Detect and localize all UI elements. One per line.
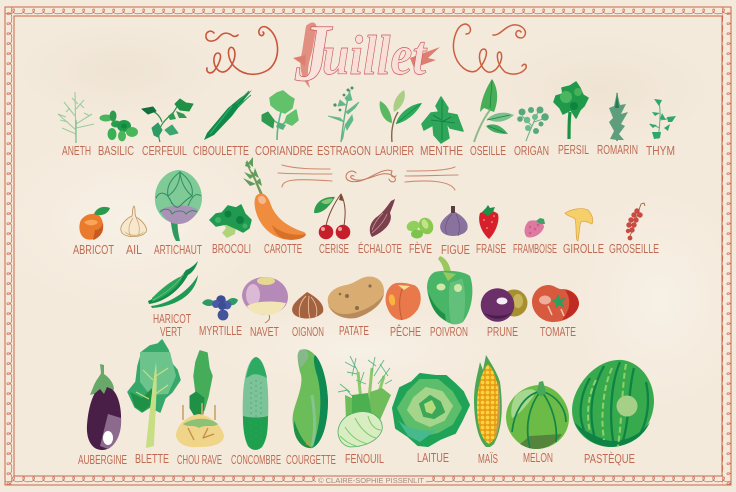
icon: coriandre: [262, 91, 298, 140]
labels: row 2: FRAISE: [476, 241, 506, 256]
labels: row 4: LAITUE: [417, 450, 449, 465]
title: J: [294, 7, 334, 98]
icon: ciboulette: [204, 90, 252, 140]
icon: persil: [554, 82, 588, 139]
labels: row 4: FENOUIL: [345, 451, 384, 466]
copyright credit: © CLAIRE-SOPHIE PISSENLIT: [318, 477, 425, 485]
title: [293, 7, 440, 98]
icon: ail: [121, 206, 146, 237]
icon: fraise: [479, 205, 498, 239]
labels: herbs: PERSIL: [558, 142, 589, 157]
labels: row 2: ARTICHAUT: [154, 242, 202, 257]
labels: row 2: FRAMBOISE: [513, 241, 557, 256]
icon: framboise: [525, 218, 545, 237]
labels: row 2: GROSEILLE: [609, 241, 659, 256]
labels: herbs: THYM: [646, 143, 675, 158]
labels: herbs: MENTHE: [420, 143, 463, 158]
labels: row 2: GIROLLE: [563, 241, 604, 256]
icon: artichaut: [155, 170, 202, 241]
right flourish: [454, 24, 526, 74]
icon: maïs: [474, 355, 502, 447]
labels: herbs: ANETH: [62, 143, 91, 158]
labels: row 2: ÉCHALOTE: [358, 241, 402, 256]
labels: herbs: LAURIER: [375, 143, 414, 158]
title: uillet: [322, 25, 427, 87]
labels: row 2: CERISE: [319, 241, 349, 256]
icon: navet: [242, 277, 288, 323]
title ribbon accents: [293, 23, 440, 88]
icon: concombre: [243, 357, 268, 450]
icon: blette: [128, 340, 180, 448]
labels: herbs: ESTRAGON: [317, 143, 371, 158]
labels: row 4: [78, 450, 635, 467]
icon: carotte: [243, 157, 306, 240]
icon: brocoli: [210, 205, 251, 238]
icon: échalote: [370, 199, 395, 237]
labels: row 3: POIVRON: [430, 324, 468, 339]
labels: row 4: PASTÈQUE: [584, 451, 635, 466]
left flourish: [206, 27, 278, 74]
icon: cerfeuil: [142, 99, 193, 142]
icon: tomate: [532, 285, 579, 322]
labels: row 2: [73, 241, 659, 257]
labels: herbs: ORIGAN: [514, 143, 549, 158]
row 4: large vegetables: [78, 340, 654, 467]
icon: abricot: [79, 207, 110, 240]
icon: cerise: [314, 193, 350, 239]
labels: row 3: PRUNE: [487, 324, 518, 339]
labels: row 3: TOMATE: [540, 324, 576, 339]
icon: pastèque: [572, 360, 654, 447]
icon: courgette: [293, 349, 328, 448]
icon: melon: [506, 381, 569, 449]
icon: laitue: [393, 374, 469, 446]
labels: herbs: ROMARIN: [597, 142, 638, 157]
icon: patate: [328, 276, 384, 318]
icon: fenouil: [338, 356, 392, 447]
icon: chou rave: [176, 351, 224, 447]
icon: figue: [440, 206, 468, 236]
labels: row 4: CHOU RAVE: [177, 452, 222, 467]
icon: oignon: [292, 292, 323, 319]
labels: row 4: COURGETTE: [286, 452, 336, 467]
icon: estragon: [328, 86, 359, 142]
labels: row 4: BLETTE: [135, 451, 169, 466]
icon: aneth: [58, 92, 94, 143]
icon: romarin: [609, 92, 628, 141]
icon: laurier: [380, 90, 422, 142]
labels: row 4: MAÏS: [478, 451, 498, 466]
labels: herbs: BASILIC: [98, 143, 134, 158]
labels: herbs: CORIANDRE: [255, 143, 313, 158]
labels: row 3: NAVET: [250, 324, 279, 339]
labels: herbs: [62, 142, 675, 158]
icon: haricot vert: [148, 261, 198, 308]
labels: row 3: OIGNON: [292, 324, 324, 339]
fennel fronds: [338, 356, 392, 396]
labels: row 3: VERT: [160, 324, 182, 339]
icon: aubergine: [87, 364, 121, 450]
icon: pêche: [386, 283, 421, 320]
labels: row 2: CAROTTE: [264, 241, 302, 256]
row 3: vegetables and fruits: [148, 256, 579, 339]
labels: herbs: OSEILLE: [470, 143, 506, 158]
labels: row 2: FÈVE: [409, 241, 432, 256]
icon: origan: [517, 106, 549, 141]
labels: row 3: MYRTILLE: [199, 323, 242, 338]
icon: myrtille: [202, 295, 238, 320]
labels: row 2: FIGUE: [441, 242, 470, 257]
icon: thym: [649, 99, 676, 139]
labels: row 2: ABRICOT: [73, 242, 114, 257]
icon: oseille: [474, 79, 514, 142]
labels: row 3: HARICOT: [153, 311, 191, 326]
labels: row 2: BROCOLI: [212, 241, 251, 256]
icon: poivron: [427, 256, 472, 324]
row 2: fruits and vegetables: [73, 157, 659, 257]
icon: basilic: [100, 110, 138, 142]
icon: prune: [481, 288, 528, 322]
labels: row 2: AIL: [126, 242, 142, 257]
labels: row 4: CONCOMBRE: [231, 452, 281, 467]
central scroll divider: [278, 165, 458, 190]
icon: groseille: [626, 203, 645, 240]
labels: row 4: MELON: [523, 450, 553, 465]
row 1: herbs: [58, 79, 676, 158]
labels: row 3: PÊCHE: [390, 324, 421, 339]
labels: herbs: CIBOULETTE: [193, 143, 249, 158]
labels: herbs: CERFEUIL: [142, 143, 187, 158]
labels: row 4: AUBERGINE: [78, 452, 127, 467]
icon: menthe: [422, 97, 463, 143]
icon: girolle: [565, 209, 593, 241]
labels: row 3: PATATE: [339, 323, 369, 338]
icon: fève: [405, 215, 436, 238]
labels: row 3: [153, 311, 576, 339]
